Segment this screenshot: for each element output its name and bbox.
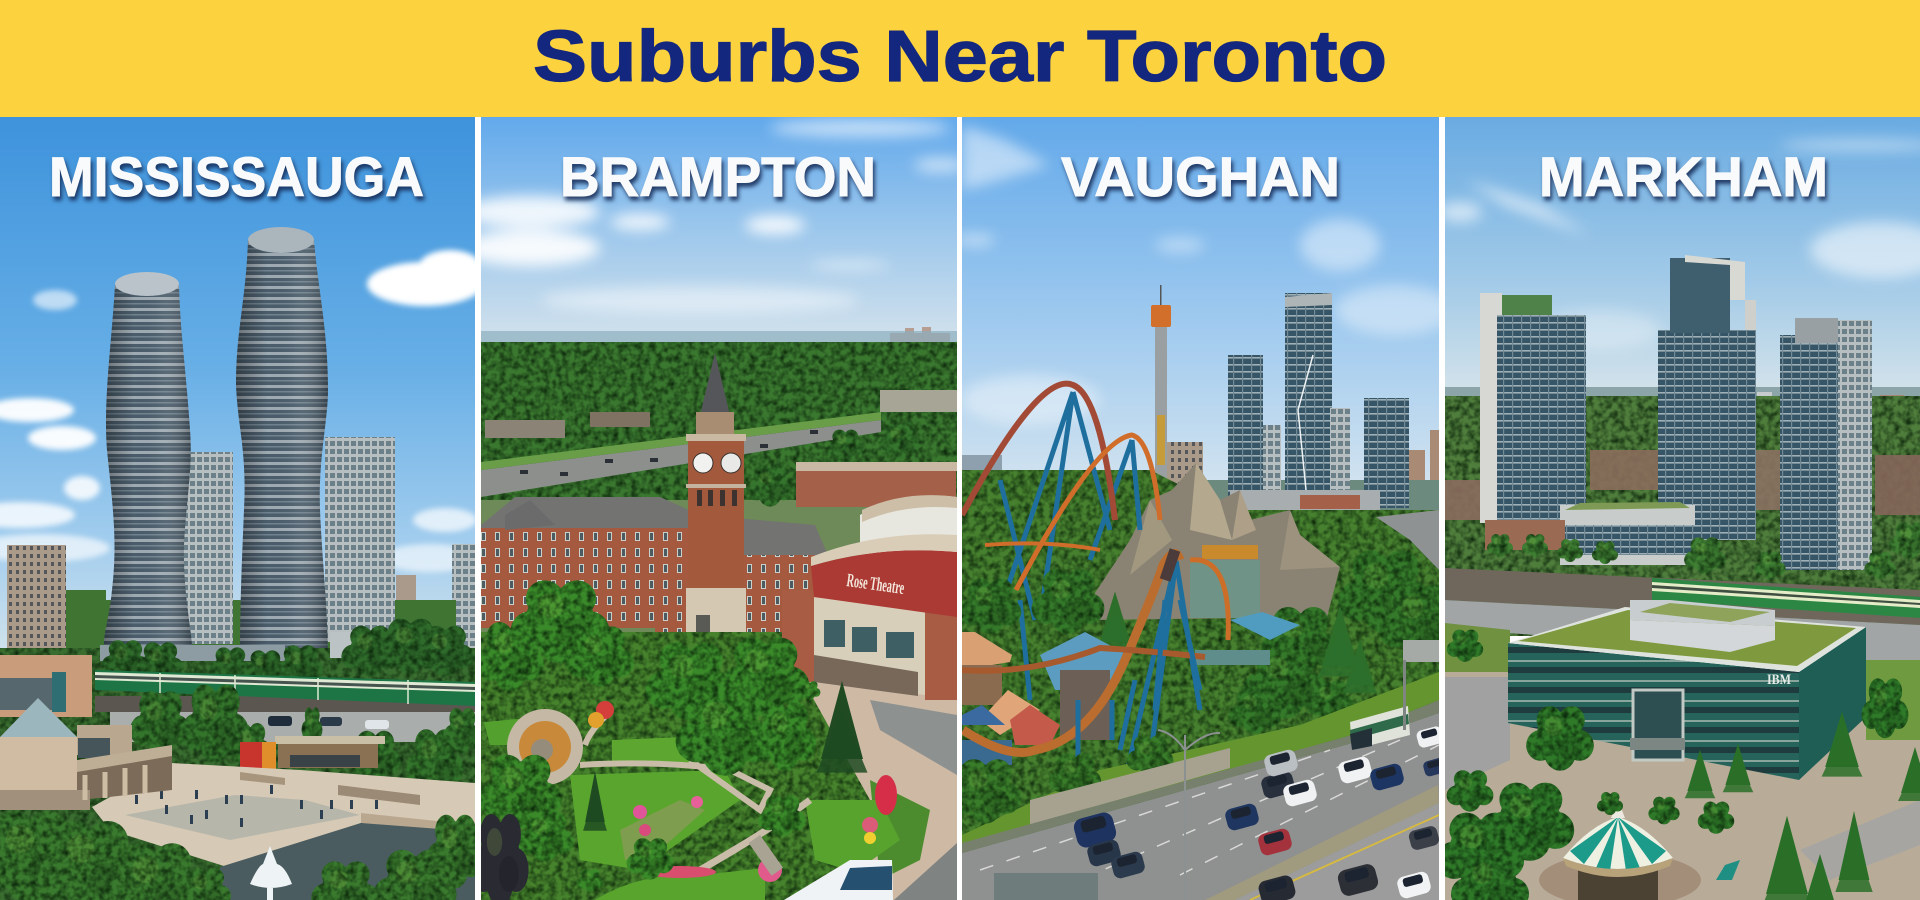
theme park tents and rides xyxy=(962,612,1300,765)
panel: Vaughan xyxy=(962,117,1439,900)
carousel xyxy=(1539,800,1701,900)
clouds xyxy=(460,119,966,314)
GO train xyxy=(1652,578,1920,618)
panel: Brampton xyxy=(481,117,957,900)
theme park trees xyxy=(959,550,1462,734)
skyline xyxy=(890,327,950,343)
park xyxy=(481,632,957,900)
podium buildings xyxy=(100,632,420,661)
pavilion xyxy=(240,736,385,770)
panel: Mississauga xyxy=(0,117,475,900)
icon: Absolute towers xyxy=(104,227,328,662)
panel: Markham xyxy=(1445,117,1920,900)
suburb houses xyxy=(481,390,957,640)
highway xyxy=(481,412,881,497)
plaza xyxy=(92,763,475,867)
drop tower xyxy=(1151,285,1171,515)
terminal with glass pyramid xyxy=(0,698,172,810)
bus xyxy=(1350,706,1410,750)
grass verge xyxy=(962,672,1439,845)
suburban houses xyxy=(1445,450,1920,520)
clouds xyxy=(955,125,1455,425)
clouds xyxy=(1438,139,1920,350)
highway xyxy=(962,700,1439,900)
distant skyline xyxy=(962,430,1439,514)
kiosk xyxy=(1716,860,1740,880)
label: Mississauga: MISSISSAUGA xyxy=(49,145,424,208)
foreground trees xyxy=(0,811,484,900)
road and tracks xyxy=(95,696,475,742)
podium xyxy=(1485,502,1695,565)
label: Vaughan: VAUGHAN xyxy=(1061,145,1340,208)
background buildings xyxy=(7,437,475,655)
park trees xyxy=(476,580,820,892)
trees behind train xyxy=(102,619,474,687)
waterfall xyxy=(1190,560,1260,618)
clouds xyxy=(0,250,483,572)
IBM logo: IBM xyxy=(1767,672,1791,688)
main coaster loop xyxy=(962,550,1205,752)
ground xyxy=(0,648,475,900)
theatre sign: Rose Theatre xyxy=(845,570,906,599)
cars xyxy=(1072,725,1448,900)
tree belt xyxy=(481,342,957,642)
ground trees xyxy=(962,470,1439,900)
far highway xyxy=(1376,510,1439,570)
distant skyline xyxy=(1445,387,1920,430)
label: Brampton: BRAMPTON xyxy=(560,145,876,208)
condo towers xyxy=(1228,293,1409,512)
mountain xyxy=(1095,463,1340,620)
reflecting pool xyxy=(220,823,475,900)
low brick buildings xyxy=(796,462,957,507)
lower ground xyxy=(1445,623,1920,900)
rollercoaster supports xyxy=(1000,392,1200,780)
Rose Theatre xyxy=(782,495,957,700)
city hall xyxy=(481,497,830,635)
condo towers xyxy=(1480,255,1872,570)
mid trees xyxy=(130,685,480,794)
rail corridor xyxy=(1445,568,1920,665)
road and sidewalks xyxy=(800,675,957,900)
lawns and paths xyxy=(484,709,900,900)
rollercoaster tracks xyxy=(962,384,1228,640)
plaza trees xyxy=(1436,630,1908,900)
title: Suburbs Near Toronto xyxy=(533,17,1387,97)
bus xyxy=(784,860,893,900)
neighbourhood xyxy=(1445,396,1920,636)
flower beds xyxy=(588,701,897,882)
street light and overhead sign xyxy=(994,640,1439,900)
header banner xyxy=(0,0,1920,117)
GO train xyxy=(95,670,475,706)
clock tower xyxy=(686,353,746,640)
IBM building xyxy=(1508,600,1866,780)
fountain xyxy=(250,846,292,900)
label: Markham: MARKHAM xyxy=(1539,145,1828,208)
mall building xyxy=(0,655,92,717)
